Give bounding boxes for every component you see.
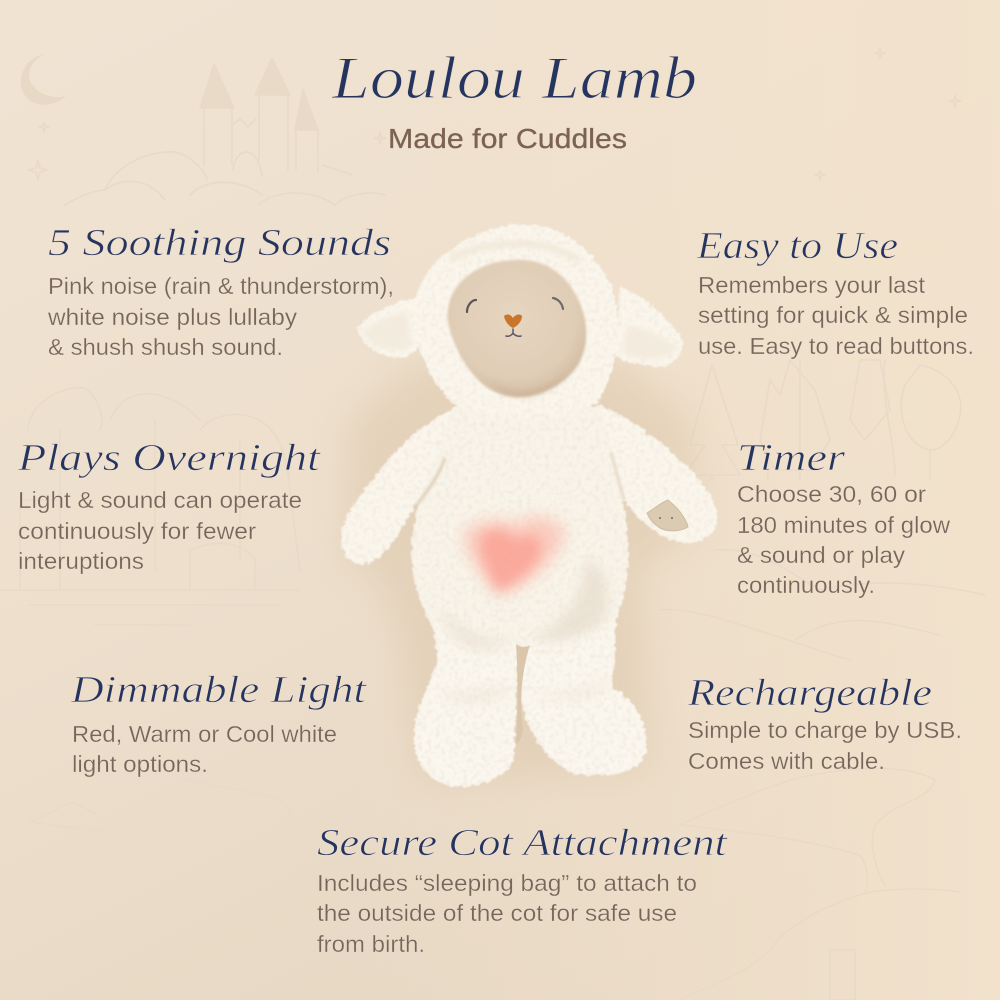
feature: easy to use: setting for quick & simple (698, 302, 968, 328)
right ear (616, 286, 684, 367)
feature: 5 soothing sounds: & shush shush sound. (48, 334, 283, 360)
feature: plays overnight: continuously for fewer (18, 518, 256, 544)
hand tag (647, 500, 688, 531)
feature: secure cot attachment: from birth. (317, 931, 425, 957)
right arm (596, 404, 717, 543)
feature: 5 soothing sounds: white noise plus lullaby (47, 304, 298, 330)
chin shading (490, 372, 566, 397)
feature: secure cot attachment: Includes “sleeping bag” to attach to (317, 870, 697, 896)
right leg (520, 618, 647, 776)
nose (504, 315, 522, 328)
feature: timer: 180 minutes of glow (737, 512, 950, 538)
feature: 5 soothing sounds (47, 222, 394, 360)
feature: timer (737, 437, 950, 598)
feature: secure cot attachment: the outside of the cot for safe use (317, 900, 677, 926)
feature: dimmable light: light options. (72, 751, 208, 777)
right eye (553, 298, 563, 309)
feature: rechargeable (687, 672, 962, 774)
left tree sketches (0, 388, 300, 625)
feature: dimmable light (70, 669, 368, 777)
mouth (506, 329, 521, 336)
feature: 5 soothing sounds: Pink noise (rain & thunderstorm), (48, 273, 394, 299)
fur body group (341, 224, 717, 787)
feature: plays overnight: interuptions (18, 548, 144, 574)
moon sketch (21, 54, 66, 105)
torso (412, 402, 628, 648)
face (448, 260, 586, 397)
feature: easy to use: use. Easy to read buttons. (698, 333, 974, 359)
feature: plays overnight: Plays Overnight (17, 437, 322, 479)
feature: timer: Timer (737, 437, 845, 479)
feature: easy to use: Remembers your last (698, 272, 926, 298)
left ear (357, 298, 422, 358)
ear inners (362, 312, 678, 359)
feature: timer: & sound or play (737, 542, 906, 568)
feature: secure cot attachment (317, 822, 729, 957)
feature: timer: Choose 30, 60 or (737, 481, 926, 507)
body shading (435, 560, 612, 700)
hood seam shading (450, 244, 580, 262)
left leg (413, 620, 517, 787)
feature: plays overnight: Light & sound can operate (18, 487, 302, 513)
feature: rechargeable: Simple to charge by USB. (688, 717, 962, 743)
feature: secure cot attachment: Secure Cot Attachment (317, 822, 729, 864)
subtitle: Made for Cuddles (388, 123, 627, 154)
feature: timer: continuously. (737, 572, 875, 598)
soft shadow (345, 360, 700, 780)
lower sketches (30, 768, 960, 1000)
feature: rechargeable: Rechargeable (687, 672, 932, 714)
feature: rechargeable: Comes with cable. (688, 748, 885, 774)
heart glow (464, 517, 565, 596)
arm crease (414, 458, 445, 508)
left arm (341, 408, 458, 564)
castle sketch (65, 58, 385, 205)
feature: 5 soothing sounds: 5 Soothing Sounds (48, 222, 391, 264)
hood (414, 224, 618, 417)
feature: plays overnight (17, 437, 322, 574)
feature: dimmable light: Red, Warm or Cool white (72, 721, 337, 747)
feature: easy to use (696, 225, 974, 359)
title: Loulou Lamb (331, 45, 697, 111)
feature: dimmable light: Dimmable Light (70, 669, 368, 711)
feature: easy to use: Easy to Use (696, 225, 898, 267)
stars (28, 48, 961, 180)
lamb plush toy (341, 224, 717, 787)
leg gap (516, 644, 530, 745)
right tree sketches (660, 360, 985, 660)
left eye (467, 300, 476, 312)
